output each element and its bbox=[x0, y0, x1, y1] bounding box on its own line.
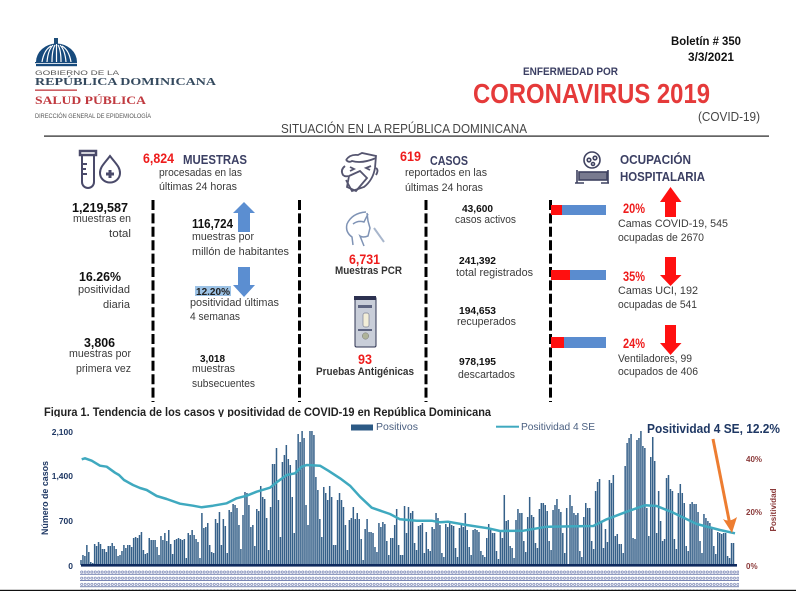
column: total samples bbox=[69, 201, 131, 375]
column: total samples: diaria bbox=[103, 299, 131, 311]
column: samples per million and positivity: subsecuentes bbox=[192, 378, 255, 390]
column: total samples: 3,806 bbox=[84, 336, 115, 350]
column: case totals: total registrados bbox=[456, 267, 533, 279]
title: ENFERMEDAD POR bbox=[523, 66, 618, 78]
panel: hospital occupancy: 35% bbox=[623, 269, 645, 284]
right axis labels: 0% bbox=[746, 562, 758, 571]
occupancy bar: covid beds bbox=[551, 205, 606, 215]
heading: ocupación hospitalaria: HOSPITALARIA bbox=[620, 169, 706, 184]
x-axis date labels bbox=[80, 570, 739, 590]
column: case totals bbox=[455, 203, 533, 381]
icon: dome bbox=[35, 38, 77, 66]
left axis title: Número de casos bbox=[40, 461, 51, 535]
left axis labels bbox=[52, 427, 73, 571]
column: PCR and antigen tests: 93 bbox=[358, 352, 372, 367]
logo: Gobierno de la República Dominicana, Salud Pública bbox=[35, 38, 217, 120]
left axis labels: 700 bbox=[59, 516, 73, 526]
column: total samples: 16.26% bbox=[79, 270, 121, 284]
chart baseline bbox=[81, 564, 737, 567]
panel: hospital occupancy: 20% bbox=[623, 201, 645, 216]
column: samples per million and positivity: 116,724 bbox=[192, 217, 233, 231]
heading: casos: reportados en las bbox=[405, 167, 487, 179]
arrow: blue down bbox=[233, 267, 255, 297]
left axis labels: 2,100 bbox=[52, 427, 73, 437]
column: total samples: muestras en bbox=[73, 213, 131, 225]
heading: casos bbox=[400, 149, 487, 194]
heading: casos: últimas 24 horas bbox=[405, 182, 483, 194]
heading: casos: CASOS bbox=[430, 153, 468, 168]
column: case totals: descartados bbox=[458, 369, 515, 381]
legend: Positivos bbox=[376, 421, 418, 433]
icon: antigen test cassette bbox=[354, 296, 376, 347]
logo: Gobierno de la República Dominicana, Salud Pública: SALUD PÚBLICA bbox=[35, 93, 147, 107]
dashed column dividers bbox=[153, 200, 550, 402]
column: samples per million and positivity: 4 semanas bbox=[190, 311, 240, 323]
column: PCR and antigen tests bbox=[316, 212, 414, 378]
column: total samples: muestras por bbox=[69, 348, 131, 360]
arrow: red down bbox=[660, 257, 682, 286]
right axis labels bbox=[746, 455, 762, 571]
panel: hospital occupancy: Camas UCI, 192 bbox=[618, 285, 698, 297]
bulletin number and date bbox=[671, 36, 741, 64]
heading: ocupación hospitalaria: OCUPACIÓN bbox=[620, 152, 691, 167]
column: case totals: 978,195 bbox=[459, 356, 496, 368]
heading: muestras: MUESTRAS bbox=[183, 152, 247, 167]
heading: ocupación hospitalaria bbox=[620, 152, 706, 184]
column: case totals: 194,653 bbox=[459, 305, 496, 317]
legend bbox=[351, 421, 595, 433]
column: PCR and antigen tests: 6,731 bbox=[349, 252, 380, 267]
panel: hospital occupancy: Camas COVID-19, 545 bbox=[618, 218, 728, 230]
panel: hospital occupancy: ocupadas de 541 bbox=[618, 299, 697, 311]
heading: situation: SITUACIÓN EN LA REPÚBLICA DOMINICANA bbox=[281, 121, 528, 136]
title: (COVID-19) bbox=[698, 110, 760, 124]
arrow: red down bbox=[660, 325, 682, 355]
column: samples per million and positivity: 12.20% bbox=[196, 286, 231, 298]
icon: nasal swab profile bbox=[347, 212, 384, 246]
arrow: blue up bbox=[233, 202, 255, 232]
chart: cases and positivity bbox=[40, 421, 780, 590]
column: case totals: recuperados bbox=[457, 316, 516, 328]
title bbox=[473, 66, 760, 124]
column: samples per million and positivity: millón de habitantes bbox=[192, 246, 289, 258]
heading: muestras: 6,824 bbox=[143, 151, 174, 166]
column: total samples: total bbox=[109, 228, 131, 240]
column: total samples: positividad bbox=[78, 284, 130, 296]
logo: Gobierno de la República Dominicana, Salud Pública: GOBIERNO DE LA bbox=[35, 70, 120, 77]
column: PCR and antigen tests: Muestras PCR bbox=[335, 265, 402, 277]
column: samples per million and positivity: muestras por bbox=[192, 231, 254, 243]
column: total samples: primera vez bbox=[76, 363, 131, 375]
panel: hospital occupancy: Ventiladores, 99 bbox=[618, 353, 692, 365]
heading: muestras: últimas 24 horas bbox=[159, 181, 237, 193]
panel: hospital occupancy: ocupados de 406 bbox=[618, 366, 698, 378]
bottom rule bbox=[0, 590, 796, 591]
column: samples per million and positivity: 3,018 bbox=[200, 353, 225, 365]
right axis labels: 40% bbox=[746, 455, 762, 464]
panel: hospital occupancy: 24% bbox=[623, 336, 645, 351]
occupancy bar: ICU beds bbox=[551, 270, 606, 280]
bulletin number and date: Boletín # 350 bbox=[671, 36, 741, 48]
title: CORONAVIRUS 2019 bbox=[473, 78, 710, 109]
icon: test tube and blood drop bbox=[80, 151, 120, 188]
right axis labels: 20% bbox=[746, 508, 762, 517]
arrow: orange to end of line bbox=[713, 439, 737, 533]
column: case totals: 43,600 bbox=[462, 203, 493, 215]
bars: daily positive cases bbox=[81, 431, 734, 565]
heading: muestras: procesadas en las bbox=[159, 167, 242, 179]
heading: muestras bbox=[143, 151, 247, 193]
logo: Gobierno de la República Dominicana, Salud Pública: DIRECCIÓN GENERAL DE EPIDEMIOLOGÍA bbox=[35, 113, 151, 120]
column: case totals: casos activos bbox=[455, 214, 516, 226]
panel: hospital occupancy: ocupadas de 2670 bbox=[618, 232, 704, 244]
legend: Positividad 4 SE bbox=[521, 421, 595, 433]
arrow: red up bbox=[660, 187, 682, 217]
panel: hospital occupancy bbox=[551, 187, 728, 378]
left axis labels: 0 bbox=[68, 561, 73, 571]
callout: positivity 12.2%: Positividad 4 SE, 12.2% bbox=[647, 422, 780, 436]
column: PCR and antigen tests: Pruebas Antigénicas bbox=[316, 366, 414, 378]
right axis title: Positividad bbox=[768, 488, 778, 532]
figure caption: Figura 1. Tendencia de los casos y positividad de COVID-19 en República Dominicana bbox=[44, 407, 492, 419]
icon: face with mask bbox=[342, 153, 378, 191]
column: samples per million and positivity: positividad últimas bbox=[190, 297, 279, 309]
column: case totals: 241,392 bbox=[459, 255, 496, 267]
line: positividad 4 SE bbox=[82, 458, 735, 533]
heading: casos: 619 bbox=[400, 149, 421, 164]
column: samples per million and positivity bbox=[190, 202, 289, 390]
column: samples per million and positivity: muestras bbox=[192, 363, 235, 375]
left axis labels: 1,400 bbox=[52, 471, 73, 481]
column: total samples: 1,219,587 bbox=[72, 201, 128, 215]
bulletin number and date: 3/3/2021 bbox=[688, 52, 735, 64]
logo: Gobierno de la República Dominicana, Salud Pública: REPÚBLICA DOMINICANA bbox=[35, 76, 217, 88]
icon: hospital bed with virus bbox=[575, 152, 609, 183]
occupancy bar: ventilators bbox=[551, 337, 606, 348]
